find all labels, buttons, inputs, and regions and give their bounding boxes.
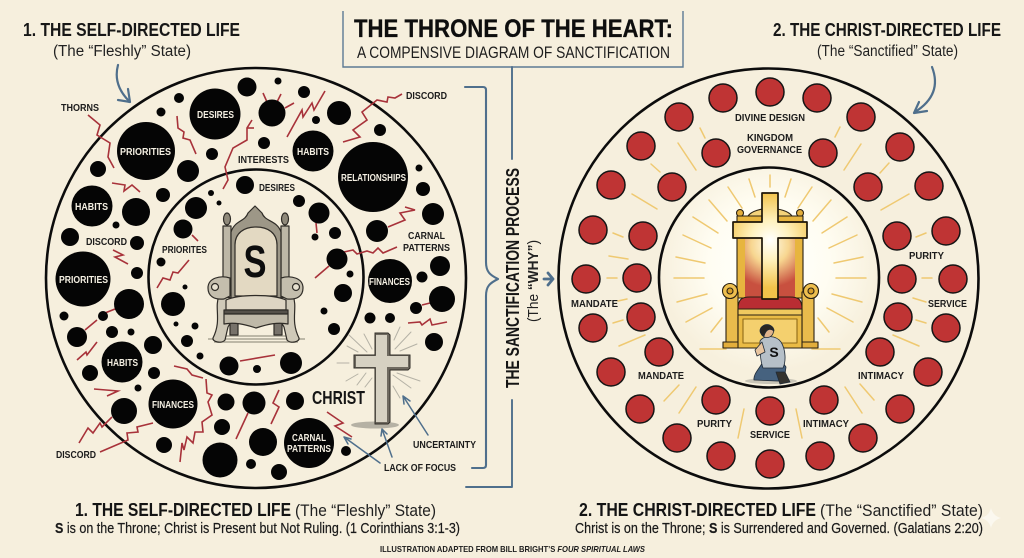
- arrows to cross: [344, 396, 428, 463]
- outside labels: INTERESTS: [238, 154, 289, 166]
- panel: self-directed life: [46, 68, 476, 488]
- right heading: [773, 19, 1001, 60]
- outside labels: DISCORD: [86, 236, 127, 248]
- labels: [571, 112, 967, 441]
- icon: kneeling man: S: [769, 344, 779, 360]
- title: THE THRONE OF THE HEART:: [354, 15, 673, 43]
- left caption: (The “Fleshly” State): [295, 502, 436, 520]
- labels: PURITY: [697, 418, 732, 430]
- labels inside black circles: FINANCES: [152, 399, 194, 411]
- right caption: [575, 499, 983, 537]
- labels: SERVICE: [928, 298, 967, 310]
- labels: PURITY: [909, 250, 944, 262]
- labels: MANDATE: [571, 298, 618, 310]
- labels inside black circles: [59, 109, 410, 455]
- labels: DIVINE DESIGN: [735, 112, 805, 124]
- outer ring rays: [607, 127, 932, 438]
- arrow: right heading to circle: [914, 67, 935, 113]
- why label: (The “WHY”): [525, 240, 542, 322]
- left heading: [23, 19, 240, 60]
- outside labels: DISCORD: [56, 449, 96, 461]
- icon: golden throne with cross: [722, 193, 818, 348]
- outside labels: DESIRES: [259, 182, 295, 194]
- panel: christ-directed life: [558, 68, 978, 488]
- left caption: S is on the Throne; Christ is Present but Not Ruling. (1 Corinthians 3:1-3): [55, 521, 460, 537]
- icon: christ cross: [337, 327, 420, 428]
- labels: MANDATE: [638, 370, 684, 382]
- sanctification process label: THE SANCTIFICATION PROCESS: [502, 168, 523, 388]
- arrow: process to right circle: [544, 273, 553, 285]
- inner rays: [674, 175, 866, 349]
- labels: INTIMACY: [803, 418, 849, 430]
- labels inside black circles: DESIRES: [197, 109, 234, 121]
- outside labels: UNCERTAINTY: [413, 439, 476, 451]
- labels: GOVERNANCE: [737, 144, 802, 156]
- connector line: [466, 67, 512, 487]
- labels: SERVICE: [750, 429, 790, 441]
- outside labels: [56, 90, 476, 474]
- outside labels: THORNS: [61, 102, 99, 114]
- right caption: (The “Sanctified” State): [820, 502, 983, 520]
- inner glow: [660, 168, 878, 386]
- labels inside black circles: PRIORITIES: [120, 146, 171, 158]
- left heading: (The “Fleshly” State): [53, 43, 191, 60]
- labels inside black circles: HABITS: [75, 201, 108, 213]
- right heading: (The “Sanctified” State): [817, 43, 958, 60]
- labels inside black circles: HABITS: [297, 146, 329, 158]
- outside labels: PRIORITES: [162, 244, 207, 256]
- left caption: 1. THE SELF-DIRECTED LIFE: [75, 499, 291, 520]
- labels: KINGDOM: [747, 132, 793, 144]
- left heading: 1. THE SELF-DIRECTED LIFE: [23, 19, 240, 40]
- labels inside black circles: PRIORITIES: [59, 274, 108, 286]
- labels inside black circles: FINANCES: [369, 276, 410, 288]
- icon: self throne: S: [244, 236, 266, 287]
- arrow: left heading to circle: [117, 65, 130, 102]
- red circles: [572, 78, 967, 478]
- outside labels: DISCORD: [406, 90, 447, 102]
- left caption: [55, 499, 460, 537]
- labels inside black circles: HABITS: [107, 357, 138, 369]
- labels inside black circles: RELATIONSHIPS: [341, 172, 406, 184]
- labels inside black circles: CARNAL: [292, 432, 326, 444]
- icon: kneeling man: [745, 324, 797, 384]
- outside labels: LACK OF FOCUS: [384, 462, 456, 474]
- title box: [343, 11, 683, 67]
- right caption: 2. THE CHRIST-DIRECTED LIFE: [579, 499, 816, 520]
- black circles: [56, 78, 455, 480]
- credit line: ILLUSTRATION ADAPTED FROM BILL BRIGHT’S FOUR SPIRITUAL LAWS: [380, 544, 645, 554]
- sanctification brace: [465, 87, 498, 468]
- thorns: [77, 91, 447, 462]
- right caption: Christ is on the Throne; S is Surrendered and Governed. (Galatians 2:20): [575, 521, 983, 537]
- sparkle: [981, 508, 1001, 528]
- labels inside black circles: PATTERNS: [287, 443, 331, 455]
- label: christ: CHRIST: [312, 388, 365, 408]
- outer and inner circles: [46, 68, 466, 488]
- labels: INTIMACY: [858, 370, 904, 382]
- outside labels: PATTERNS: [403, 242, 450, 254]
- icon: self throne: [208, 206, 305, 342]
- outside labels: CARNAL: [408, 230, 445, 242]
- outer and inner circles: [558, 68, 978, 488]
- subtitle: A COMPENSIVE DIAGRAM OF SANCTIFICATION: [357, 43, 670, 62]
